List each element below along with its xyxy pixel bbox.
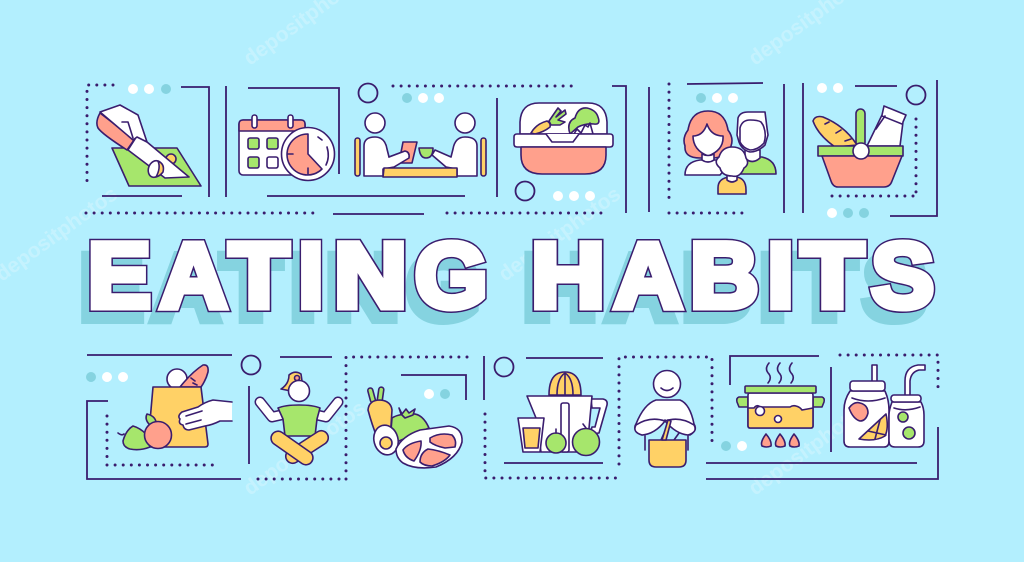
title: Eating Habits: G [415,224,487,327]
title shadow: S [863,236,926,339]
icon: healthy food group [367,387,462,468]
title: Eating Habits: T [229,224,289,327]
icon: food container [514,103,613,174]
title: Eating Habits: N [334,225,407,327]
title: Eating Habits: B [690,224,758,327]
watermark: depositphotos [239,396,370,500]
title: Eating Habits: E [88,224,151,327]
title shadow: B [682,236,750,339]
right person [432,113,486,176]
title: Eating Habits: S [871,224,934,327]
man [737,112,776,174]
dotted lines top [86,84,916,213]
title: Eating Habits: A [614,224,682,327]
title shadow: T [221,236,281,339]
title shadow: T [793,236,856,339]
title: Eating Habits [88,223,934,327]
title: Eating Habits: B [690,224,758,327]
title shadow [80,235,926,339]
icon: family [684,111,776,194]
woman [684,111,732,175]
title shadow: A [152,235,219,339]
title: Eating Habits: I [298,225,323,327]
title shadow: I [760,236,786,339]
title: Eating Habits: I [298,225,323,327]
frame lines top [102,80,937,216]
icon: hand cutting food on board [97,105,201,186]
icon: picnic basket [813,106,906,187]
watermark: depositphotos [494,182,625,286]
title shadow: E [80,236,143,339]
dotted lines bottom [107,355,938,480]
child [716,147,748,194]
watermark: depositphotos [744,396,875,500]
title shadow: I [290,237,315,339]
title: Eating Habits: H [531,224,605,327]
title: Eating Habits: T [801,224,864,327]
frame lines bottom [87,355,938,479]
title: Eating Habits: E [88,224,151,327]
icon: grocery bag with hand [118,365,232,450]
title shadow: A [606,236,674,339]
icon: calendar and clock [239,115,334,180]
title: Eating Habits: I [768,224,794,327]
title: Eating Habits: S [871,224,934,327]
title: Eating Habits: G [415,224,487,327]
icon: person holding basket [635,370,695,467]
title: Eating Habits: T [801,224,864,327]
title: Eating Habits: A [614,224,682,327]
accent dots [86,83,869,451]
icon: citrus juicer with apples [518,372,607,456]
title: Eating Habits: H [531,224,605,327]
title shadow: G [407,236,479,339]
left person [355,113,409,176]
title: Eating Habits: A [160,223,227,327]
title: Eating Habits: I [768,224,794,327]
title: Eating Habits: N [334,225,407,327]
watermark [0,0,875,500]
title shadow: H [523,236,597,339]
title: Eating Habits: A [160,223,227,327]
icon: boiling pot on burner [737,363,824,447]
icon: two people at a table [355,113,486,177]
title shadow: N [326,237,399,339]
icon: woman sitting cross-legged [260,372,338,467]
title: Eating Habits: T [229,224,289,327]
icon: drink jars with straws [844,365,925,447]
